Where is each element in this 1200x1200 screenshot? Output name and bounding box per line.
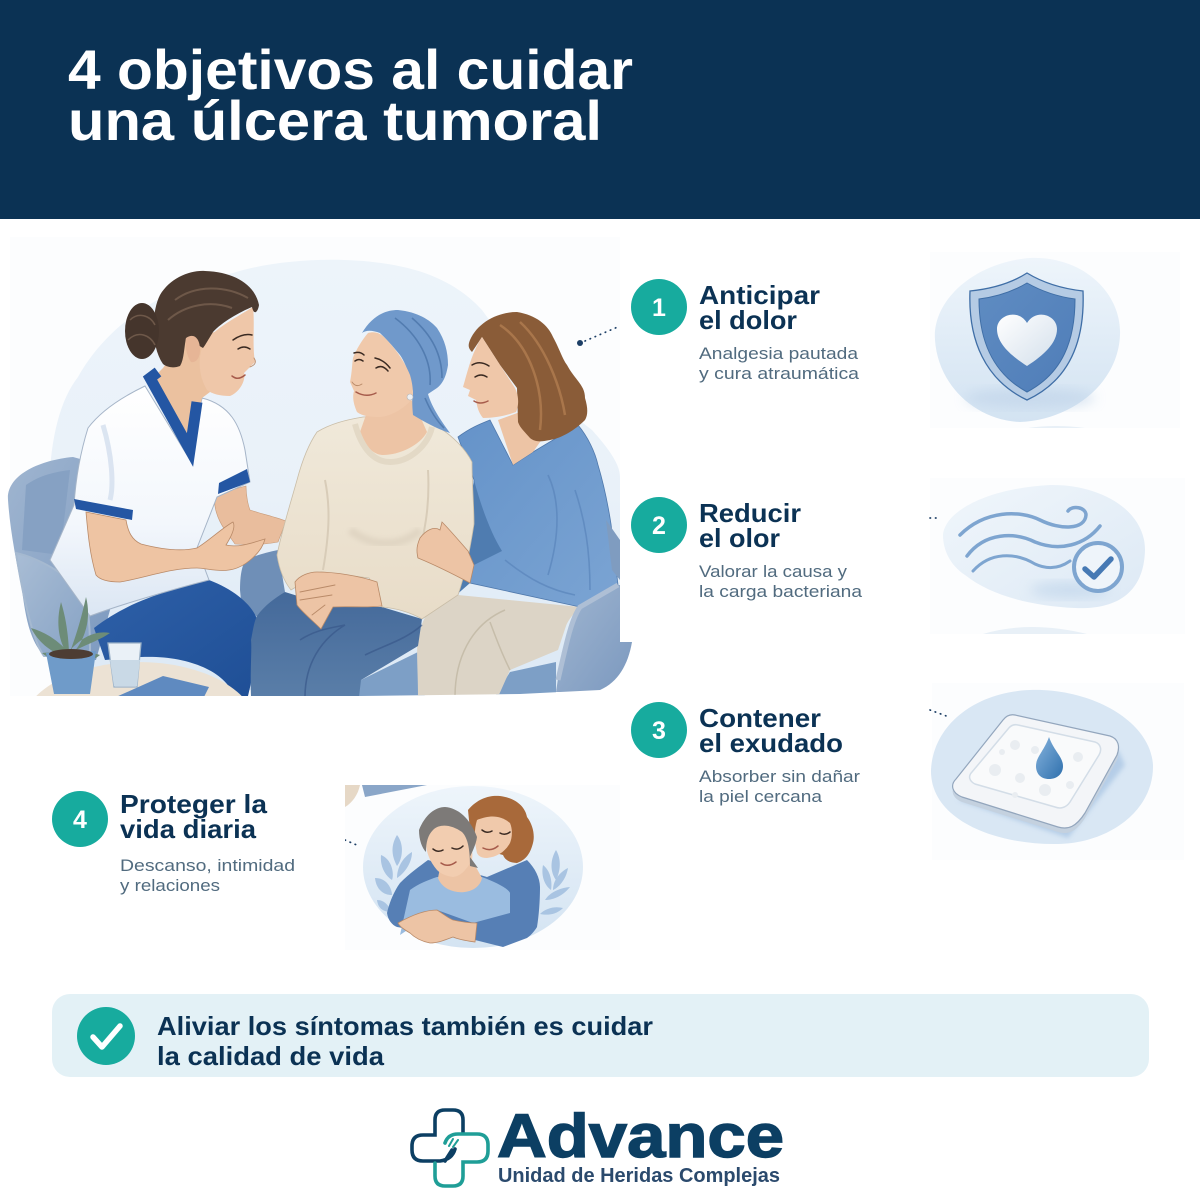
heading 4 [120, 789, 268, 844]
description 2: Valorar la causa y [699, 562, 848, 581]
banner text [157, 1011, 653, 1071]
banner text: la calidad de vida [157, 1041, 385, 1071]
front woman face [426, 823, 472, 877]
description 4: Descanso, intimidad [120, 856, 295, 875]
companion eye and mouth [472, 363, 489, 403]
companion sweater and arms [387, 860, 540, 947]
illustration: two women embracing [345, 785, 583, 948]
patient neck [360, 400, 427, 455]
plant [31, 597, 110, 694]
description 3: Absorber sin dañar [699, 767, 860, 786]
left armchair [8, 457, 120, 660]
nurse right arm behind [215, 486, 286, 545]
heading 3: el exudado [699, 728, 843, 758]
front woman hair [419, 807, 478, 868]
heading 1: Anticipar [699, 280, 820, 310]
panel: objetivo 3 [631, 702, 860, 806]
heading 1: el dolor [699, 305, 797, 335]
callout banner [52, 994, 1149, 1077]
table [36, 662, 242, 696]
title [68, 38, 633, 152]
header band [0, 0, 1200, 219]
description 4 [120, 856, 295, 895]
logo [412, 1102, 784, 1187]
title: 4 objetivos al cuidar [68, 38, 633, 101]
patient jeans [251, 592, 422, 697]
banner text: Aliviar los síntomas también es cuidar [157, 1011, 653, 1041]
companion sweater [458, 420, 618, 607]
title: una úlcera tumoral [68, 89, 602, 152]
nurse forearm and hand [86, 512, 265, 582]
patient face [350, 332, 413, 417]
companion hair [469, 312, 587, 441]
description 3 [699, 767, 860, 806]
faces closed eyes and smile [433, 830, 510, 865]
badge 1: 1 [652, 294, 666, 322]
nurse sleeve bands [74, 499, 133, 520]
icon: check circle [77, 1007, 135, 1065]
nurse neck [157, 332, 214, 433]
badge 2 [631, 497, 687, 553]
sofa seat and right seat [355, 652, 556, 697]
badge 4: 4 [73, 806, 87, 834]
badge 4 [52, 791, 108, 847]
companion hair [468, 796, 534, 863]
description 4: y relaciones [120, 876, 220, 895]
right armchair [556, 520, 632, 692]
nurse collar [150, 372, 197, 450]
front woman neck [438, 860, 482, 892]
leaves [375, 835, 570, 915]
nurse hair bun [125, 303, 159, 359]
companion trousers [417, 595, 580, 697]
panel: objetivo 4 [52, 789, 295, 895]
description 2: la carga bacteriana [699, 582, 863, 601]
connector dots [577, 326, 620, 346]
companion face [463, 337, 518, 418]
badge 3 [631, 702, 687, 758]
wordmark: Advance [497, 1102, 784, 1170]
badge 2: 2 [652, 512, 666, 540]
description 2 [699, 562, 863, 601]
glass of water [108, 643, 141, 687]
companion face [475, 817, 512, 858]
nurse trousers [94, 580, 257, 696]
panel: objetivo 2 [631, 497, 863, 601]
description 1: Analgesia pautada [699, 344, 859, 363]
companion hand on patient arm [417, 522, 474, 583]
nurse scrub top [50, 386, 250, 616]
sweater neckband [355, 424, 432, 462]
heading 2 [699, 498, 801, 553]
icon: absorbent dressing with drop [930, 683, 1184, 860]
nurse hair back and top [154, 271, 259, 367]
patient headscarf [362, 310, 450, 433]
icon: air waves with check [930, 478, 1185, 634]
heading 2: Reducir [699, 498, 801, 528]
heading 4: vida diaria [120, 814, 257, 844]
patient eyes, mouth, earring [352, 352, 413, 400]
description 1 [699, 344, 860, 383]
nurse face [200, 307, 255, 396]
front woman sweater [400, 877, 510, 935]
description 3: la piel cercana [699, 787, 823, 806]
icon: shield with heart [930, 252, 1180, 428]
panel: objetivo 1 [631, 279, 860, 383]
nurse eye and mouth [232, 335, 255, 378]
description 1: y cura atraumática [699, 364, 860, 383]
heading 4: Proteger la [120, 789, 268, 819]
patient sweater [277, 415, 474, 619]
nurse ear [186, 336, 200, 362]
badge 1 [631, 279, 687, 335]
patient hands [295, 572, 382, 629]
heading 3: Contener [699, 703, 821, 733]
heading 3 [699, 703, 843, 758]
heading 1 [699, 280, 820, 335]
notebook [116, 676, 209, 697]
heading 2: el olor [699, 523, 780, 553]
tagline: Unidad de Heridas Complejas [498, 1165, 780, 1187]
center armchair [240, 550, 285, 617]
main illustration: nurse, patient and companion [8, 260, 632, 696]
companion neck [498, 412, 540, 465]
badge 3: 3 [652, 717, 666, 745]
icon: cross with hands [412, 1110, 488, 1186]
clasped hands [398, 910, 477, 943]
